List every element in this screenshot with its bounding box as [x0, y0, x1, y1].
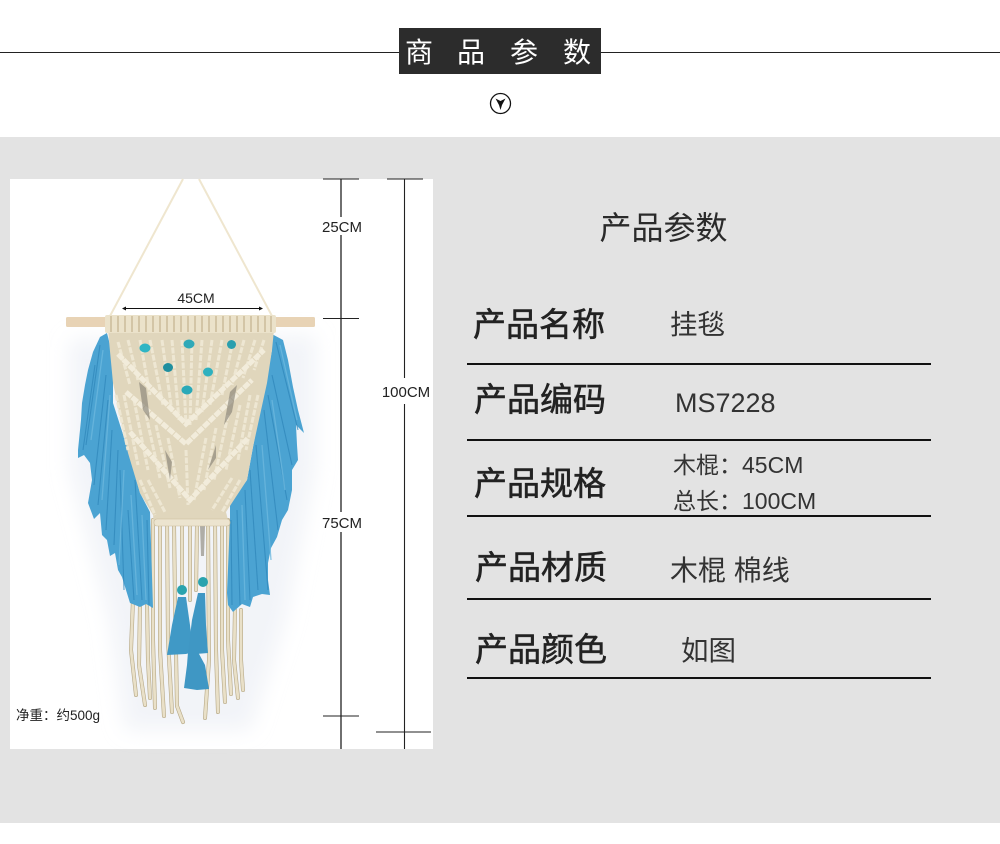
- row: product code: MS7228: [675, 388, 776, 418]
- dimension: 100CM: 100CM: [382, 384, 430, 401]
- photo shadow: [70, 335, 315, 730]
- row: product size: [467, 452, 931, 516]
- row: product colour: 如图: [681, 635, 736, 666]
- row: product material: [467, 549, 931, 599]
- row: product material: 产品材质: [475, 549, 607, 586]
- dimension: 25CM and 75CM: 75CM: [322, 515, 362, 532]
- panel heading: 产品参数: [599, 210, 728, 246]
- row: product name: 产品名称: [473, 306, 605, 343]
- header badge: 商品参数: [399, 28, 601, 74]
- knot band: [105, 315, 276, 333]
- panel: product photo: [10, 179, 433, 749]
- wooden rod: [66, 317, 315, 327]
- header rule: [0, 52, 1000, 54]
- wrap knot: [154, 519, 230, 526]
- header badge: 商品参数: 品: [457, 37, 485, 68]
- width label: 45CM: 45CM: [177, 290, 215, 306]
- dimension: 100CM: [376, 179, 432, 749]
- width label: 45CM: [122, 290, 263, 310]
- blue fringe left: [78, 333, 153, 608]
- dimension: 25CM and 75CM: [320, 179, 364, 749]
- blue tassels: [167, 577, 209, 690]
- row: product size: 产品规格: [474, 465, 606, 502]
- net weight note: 净重：约500g: [16, 708, 100, 723]
- row: product size: 木棍：45CM: [673, 452, 803, 478]
- row: product name: [467, 306, 931, 364]
- macrame body: [108, 330, 274, 556]
- blue fringe right: [227, 333, 304, 612]
- icon: circled down arrow: [490, 94, 510, 114]
- dimension: 25CM and 75CM: 25CM: [322, 219, 362, 236]
- hanging cords: [131, 520, 243, 722]
- row: product colour: [467, 631, 931, 678]
- header badge: 商品参数: 参: [510, 37, 538, 68]
- hanging cord: [110, 179, 272, 316]
- row: product colour: 产品颜色: [475, 631, 607, 668]
- turquoise beads: [140, 340, 236, 394]
- row: product code: [467, 381, 931, 440]
- row: product size: 总长：100CM: [673, 488, 816, 514]
- row: product code: 产品编码: [474, 381, 606, 418]
- header badge: 商品参数: 商: [405, 37, 433, 68]
- header badge: 商品参数: 数: [563, 37, 591, 68]
- row: product name: 挂毯: [670, 309, 725, 340]
- row: product material: 木棍 棉线: [670, 555, 790, 586]
